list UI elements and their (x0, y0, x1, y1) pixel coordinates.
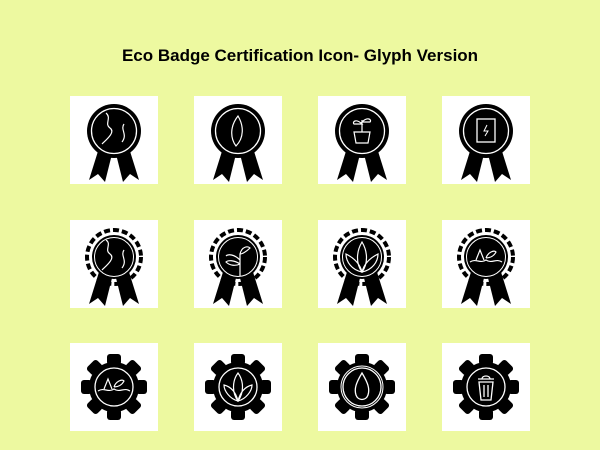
panel: globe rosette (70, 220, 158, 308)
panel: leaf medal (194, 96, 282, 184)
panel: sprout rosette (194, 220, 282, 308)
panel: trash bin gear (442, 343, 530, 431)
title: Eco Badge Certification Icon- Glyph Version (122, 46, 478, 65)
panel: leaves gear (194, 343, 282, 431)
panel: ground plant gear (70, 343, 158, 431)
panel: globe medal (70, 96, 158, 184)
panel: plant pot medal (318, 96, 406, 184)
panel: ground plant rosette (442, 220, 530, 308)
panel: energy medal (442, 96, 530, 184)
panel: leaves rosette (318, 220, 406, 308)
panel: water drop gear (318, 343, 406, 431)
